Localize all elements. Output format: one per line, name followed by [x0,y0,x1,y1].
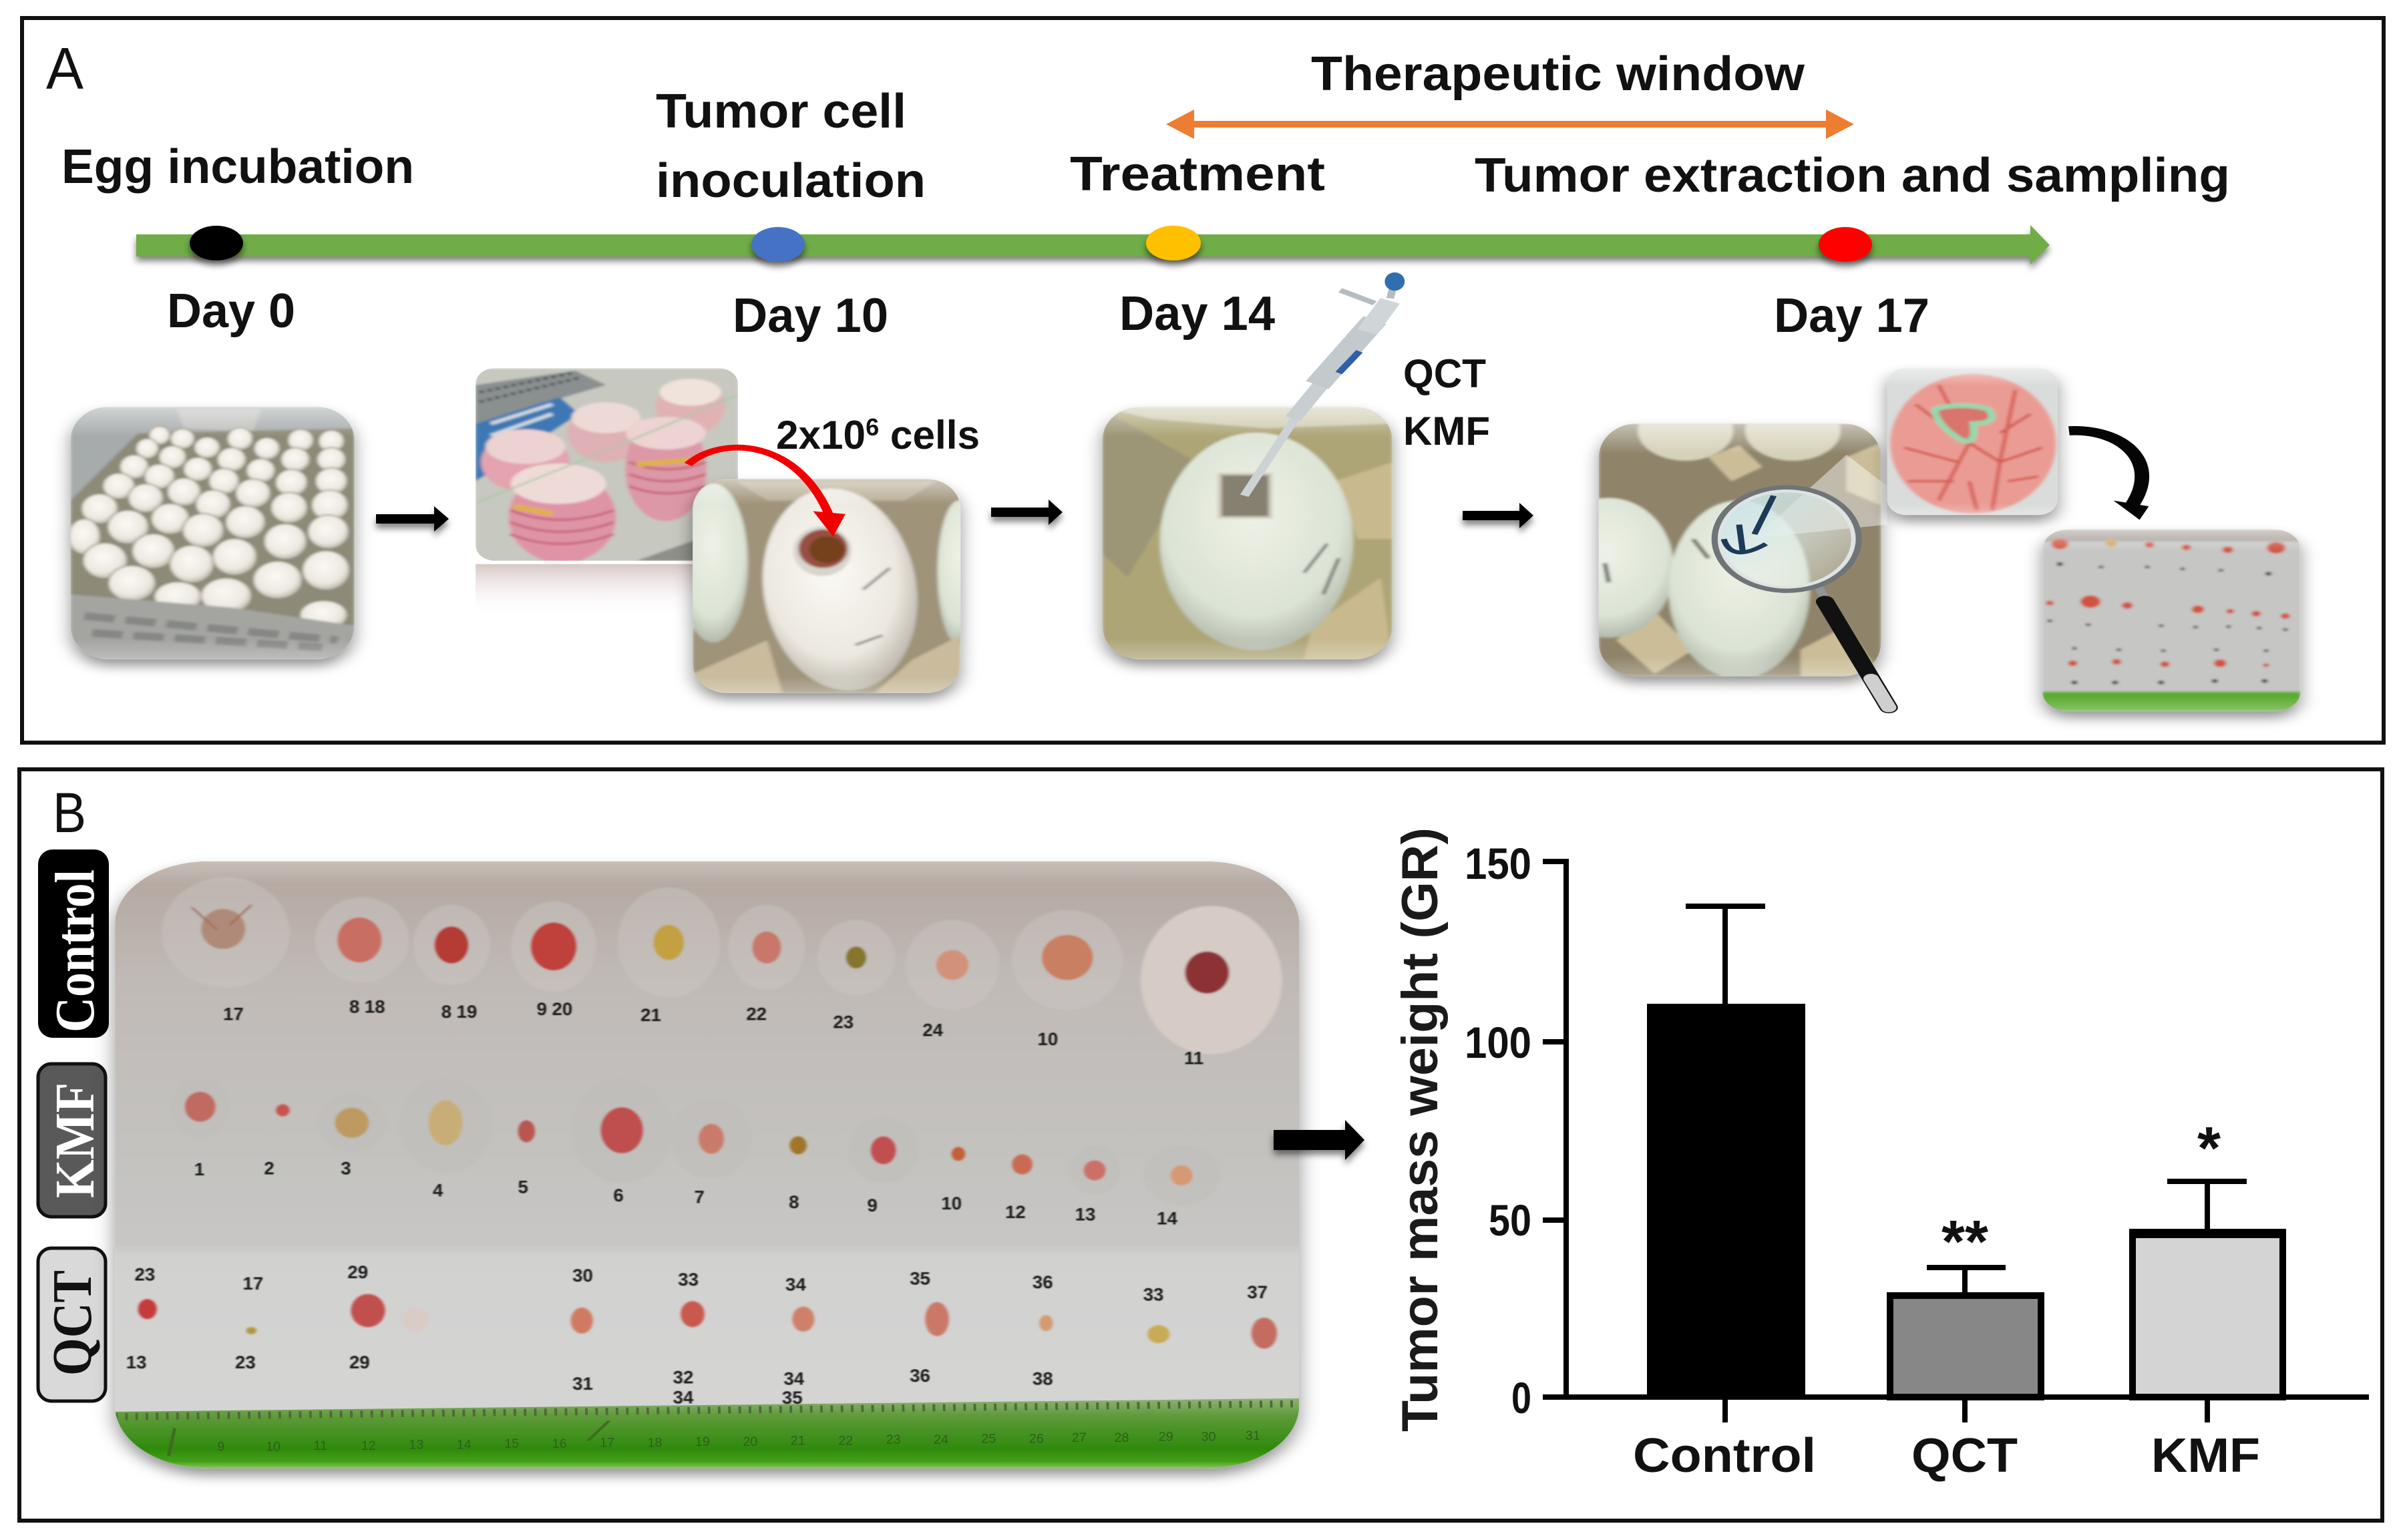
green ruler [115,1398,1299,1469]
green ruler: 31 [1246,1428,1260,1443]
icon: magnifying glass [1716,488,1889,707]
photo: CAM membrane with tumor [1887,368,2058,515]
KMF sample numbers: 6 [613,1185,624,1205]
photo: excised tumors plate [115,861,1299,1469]
QCT sample numbers [126,1262,1268,1408]
KMF sample numbers: 4 [433,1180,443,1200]
QCT sample numbers: 38 [1033,1368,1053,1388]
marker: day 10 [751,227,805,262]
arrow: treatment to extraction [1463,503,1533,528]
y tick labels: 150 [1465,839,1531,888]
control sample numbers: 8 19 [441,1001,477,1022]
arrow: curved membrane to plate [2069,431,2149,520]
arrow: plate to chart [1274,1120,1364,1160]
QCT sample numbers: 29 [349,1352,370,1372]
KMF sample numbers: 10 [941,1193,962,1213]
photo: small tumor plate [2042,530,2301,711]
green ruler: 19 [695,1434,710,1449]
panel B: results [19,769,2382,1521]
significance: QCT: ** [1941,1209,1988,1276]
photo: egg tray [68,407,355,659]
label: 2x10^6 cells: 6 [866,413,879,441]
label: Tumor cell inoculation: Tumor cell [656,85,906,138]
label: Day 0: Day 0 [167,284,295,338]
marker: day 0 [190,226,243,260]
axes and ticks [1543,861,2369,1422]
control sample numbers: 8 18 [349,996,385,1016]
green ruler: 22 [838,1434,853,1448]
y axis title: Tumor mass weight (GR) [1392,827,1449,1432]
control sample numbers [223,996,1204,1068]
QCT sample numbers: 23 [135,1264,155,1284]
control sample numbers: 11 [1184,1048,1204,1068]
KMF sample numbers: 8 [789,1191,799,1212]
QCT sample numbers: 30 [572,1265,593,1286]
y tick labels [1465,839,1531,1422]
QCT sample numbers: 37 [1247,1282,1268,1302]
QCT sample numbers: 33 [678,1269,699,1290]
label: Day 17: Day 17 [1774,289,1929,343]
label: KMF treatment: KMF [1403,409,1490,453]
marker: day 17 [1819,227,1872,262]
QCT sample numbers: 32 [673,1367,693,1387]
QCT sample numbers: 34 [785,1274,806,1294]
green ruler: 27 [1072,1430,1087,1445]
label: QCT treatment: QCT [1403,351,1486,396]
photo: cultured cell dishes [476,368,980,694]
QCT sample numbers: 35 [782,1387,803,1408]
KMF row tumors [170,1078,1220,1228]
icon: pipette [1244,272,1405,496]
green ruler: 12 [361,1438,376,1453]
label: Tumor cell inoculation: inoculation [656,154,926,208]
KMF sample numbers: 3 [341,1158,351,1178]
arrow: therapeutic window span [1166,110,1854,139]
bar: KMF [2129,1181,2286,1397]
control sample numbers: 24 [922,1020,944,1040]
marker: day 14 [1146,226,1201,260]
label: Day 10: Day 10 [733,289,888,343]
control sample numbers: 23 [833,1012,854,1032]
x label: Control: Control [1633,1429,1816,1483]
row label: KMF: KMF [44,1083,106,1198]
bar chart: tumor mass weight [1392,827,2369,1483]
arrow: tray to cells [376,506,449,532]
KMF sample numbers: 13 [1075,1204,1095,1224]
green ruler: 28 [1114,1430,1129,1445]
control sample numbers: 10 [1038,1028,1058,1049]
green ruler: 9 [217,1440,224,1454]
green ruler: 30 [1201,1430,1216,1444]
heading: Therapeutic window: Therapeutic window [1311,47,1805,101]
green ruler: 23 [886,1432,901,1447]
green ruler: 13 [409,1438,423,1452]
KMF sample numbers: 7 [695,1187,705,1207]
KMF sample numbers: 1 [194,1159,204,1179]
green ruler: 10 [266,1440,281,1454]
green ruler: 18 [647,1436,663,1450]
label: 2x10^6 cells: 2x10 [776,413,865,457]
green ruler: 16 [552,1436,567,1451]
panel letter B: B [53,781,86,844]
QCT sample numbers: 23 [235,1352,256,1372]
label: Tumor cell inoculation [656,85,926,208]
reflection of cell dishes [476,564,738,617]
KMF sample numbers [194,1158,1178,1228]
green ruler: 17 [600,1436,614,1450]
green ruler: 24 [934,1432,948,1447]
green ruler: 26 [1029,1432,1044,1446]
QCT sample numbers: 33 [1143,1284,1163,1304]
photo: treated egg [1103,407,1393,659]
QCT sample numbers: 35 [910,1268,930,1288]
green ruler: 11 [313,1438,327,1453]
QCT sample numbers: 34 [783,1368,805,1388]
photo: egg under magnifier [1586,422,1898,713]
arrow: inoculation to treatment [991,500,1063,525]
green ruler: 21 [791,1434,805,1448]
QCT sample numbers: 13 [126,1352,146,1372]
photo: inoculated egg [679,479,980,694]
y tick labels: 50 [1489,1195,1531,1245]
QCT row tumors [126,1262,1277,1408]
label: Day 14: Day 14 [1119,287,1275,341]
KMF sample numbers: 5 [518,1177,528,1197]
QCT sample numbers: 17 [243,1273,263,1294]
significance: KMF: * [2197,1115,2221,1182]
y tick labels: 0 [1511,1373,1531,1422]
row label: Control: Control [44,870,106,1032]
QCT sample numbers: 34 [673,1387,694,1407]
QCT sample numbers: 36 [910,1365,930,1386]
control row tumors [162,878,1282,1068]
green ruler: 29 [1159,1430,1173,1444]
green ruler: 14 [457,1438,472,1452]
arrow: red transfer arc [688,447,846,537]
beam: magnified view [1754,455,1887,538]
QCT sample numbers: 29 [347,1262,368,1282]
KMF sample numbers: 14 [1157,1208,1178,1228]
label: Treatment: Treatment [1070,148,1325,201]
timeline arrow [136,225,2050,264]
KMF sample numbers: 12 [1005,1201,1026,1222]
QCT sample numbers: 31 [572,1373,593,1394]
bar: Control [1647,906,1805,1397]
green ruler: 25 [981,1432,996,1446]
KMF sample numbers: 2 [264,1158,274,1178]
QCT sample numbers: 36 [1033,1272,1053,1292]
y tick labels: 100 [1465,1018,1531,1067]
row label: QCT: QCT [41,1270,104,1376]
x label: QCT: QCT [1911,1429,2018,1483]
label: 2x10^6 cells: cells [879,413,980,457]
control sample numbers: 17 [223,1004,244,1024]
panel A: experimental timeline [22,18,2384,743]
panel letter A: A [46,35,83,102]
control sample numbers: 22 [746,1004,767,1024]
control sample numbers: 21 [640,1004,661,1025]
label: Egg incubation: Egg incubation [61,140,414,194]
label: Tumor extraction and sampling: Tumor extraction and sampling [1475,149,2230,202]
green ruler: 20 [743,1434,757,1449]
KMF sample numbers: 9 [867,1195,878,1215]
control sample numbers: 9 20 [537,998,572,1019]
x label: KMF: KMF [2151,1429,2260,1483]
green ruler: 15 [504,1436,519,1451]
bar: QCT [1890,1268,2041,1397]
